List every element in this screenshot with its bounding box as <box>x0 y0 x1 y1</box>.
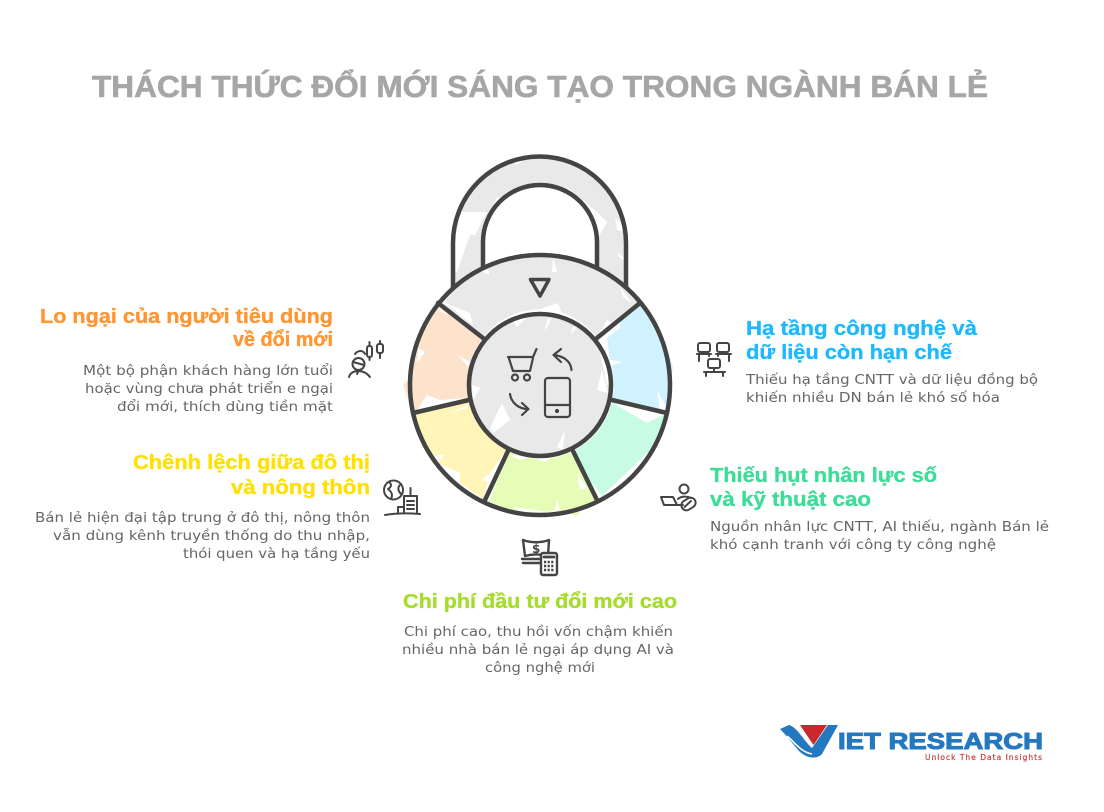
heading <box>746 317 978 364</box>
title: THÁCH THỨC ĐỔI MỚI SÁNG TẠO TRONG NGÀNH BÁN LẺ <box>92 68 988 104</box>
heading: Chênh lệch giữa đô thị <box>133 451 370 474</box>
segment: green talent <box>573 400 667 500</box>
body text: Nguồn nhân lực CNTT, AI thiếu, ngành Bán lẻ <box>710 520 1049 535</box>
logo mark <box>780 725 838 758</box>
keyhole triangle <box>530 280 549 296</box>
panel: digital talent shortage <box>710 464 1049 553</box>
panel: investment cost <box>402 590 677 676</box>
body text: công nghệ mới <box>485 661 595 676</box>
panel: urban rural gap <box>35 451 370 562</box>
heading: về đổi mới <box>233 328 333 351</box>
segment: yellow urban rural <box>413 400 508 500</box>
body text: Chi phí cao, thu hồi vốn chậm khiến <box>404 625 673 640</box>
logo tagline: Unlock The Data Insights <box>925 753 1042 762</box>
heading: dữ liệu còn hạn chế <box>746 341 953 364</box>
icon: money and calculator: $ <box>532 542 540 556</box>
padlock diagram <box>403 154 673 518</box>
heading: và kỹ thuật cao <box>710 488 871 511</box>
icon: money and calculator <box>522 540 557 575</box>
panel: tech infrastructure <box>745 317 1038 406</box>
body text: vẫn dùng kênh truyền thống do thu nhập, <box>53 529 370 544</box>
segment: lime cost <box>485 451 603 516</box>
heading: Hạ tầng công nghệ và <box>746 317 978 340</box>
heading: và nông thôn <box>231 476 370 499</box>
body text: Bán lẻ hiện đại tập trung ở đô thị, nông thôn <box>35 511 370 526</box>
body text: Một bộ phận khách hàng lớn tuổi <box>83 364 333 379</box>
logo: Viet Research <box>780 725 1043 762</box>
segment: grey top <box>438 255 640 338</box>
icon: person with laptop <box>661 484 698 512</box>
body text: đổi mới, thích dùng tiền mặt <box>117 400 333 415</box>
lock centre disc <box>469 314 611 456</box>
segment: blue infrastructure <box>597 303 673 413</box>
icon: person with candlestick chart <box>349 341 383 377</box>
body text <box>83 364 333 415</box>
panel: consumer concerns <box>40 305 333 415</box>
body text <box>402 625 674 676</box>
heading: Lo ngại của người tiêu dùng <box>40 305 333 328</box>
lock shackle <box>448 154 630 295</box>
body text: khiến nhiều DN bán lẻ khó số hóa <box>746 391 1000 406</box>
heading: Thiếu hụt nhân lực số <box>710 464 937 487</box>
sketchy fill gaps <box>417 258 672 518</box>
body text: nhiều nhà bán lẻ ngại áp dụng AI và <box>402 643 674 658</box>
body text: Thiếu hạ tầng CNTT và dữ liệu đồng bộ <box>745 373 1038 388</box>
heading <box>710 464 937 511</box>
lock outline strokes <box>410 255 670 515</box>
logo wordmark: IET RESEARCH <box>838 728 1043 754</box>
heading <box>40 305 333 351</box>
body text: khó cạnh tranh với công ty công nghệ <box>710 538 996 553</box>
icon: networked computers <box>697 343 731 376</box>
heading: Chi phí đầu tư đổi mới cao <box>403 590 677 613</box>
body text <box>745 373 1038 406</box>
body text <box>710 520 1049 553</box>
body text <box>35 511 370 562</box>
icon: shopping cart and phone <box>508 349 572 417</box>
segment: orange consumers <box>403 303 483 413</box>
icon: globe and city <box>384 480 420 515</box>
body text: thói quen và hạ tầng yếu <box>183 547 370 562</box>
heading <box>133 451 370 499</box>
body text: hoặc vùng chưa phát triển e ngại <box>85 382 333 397</box>
